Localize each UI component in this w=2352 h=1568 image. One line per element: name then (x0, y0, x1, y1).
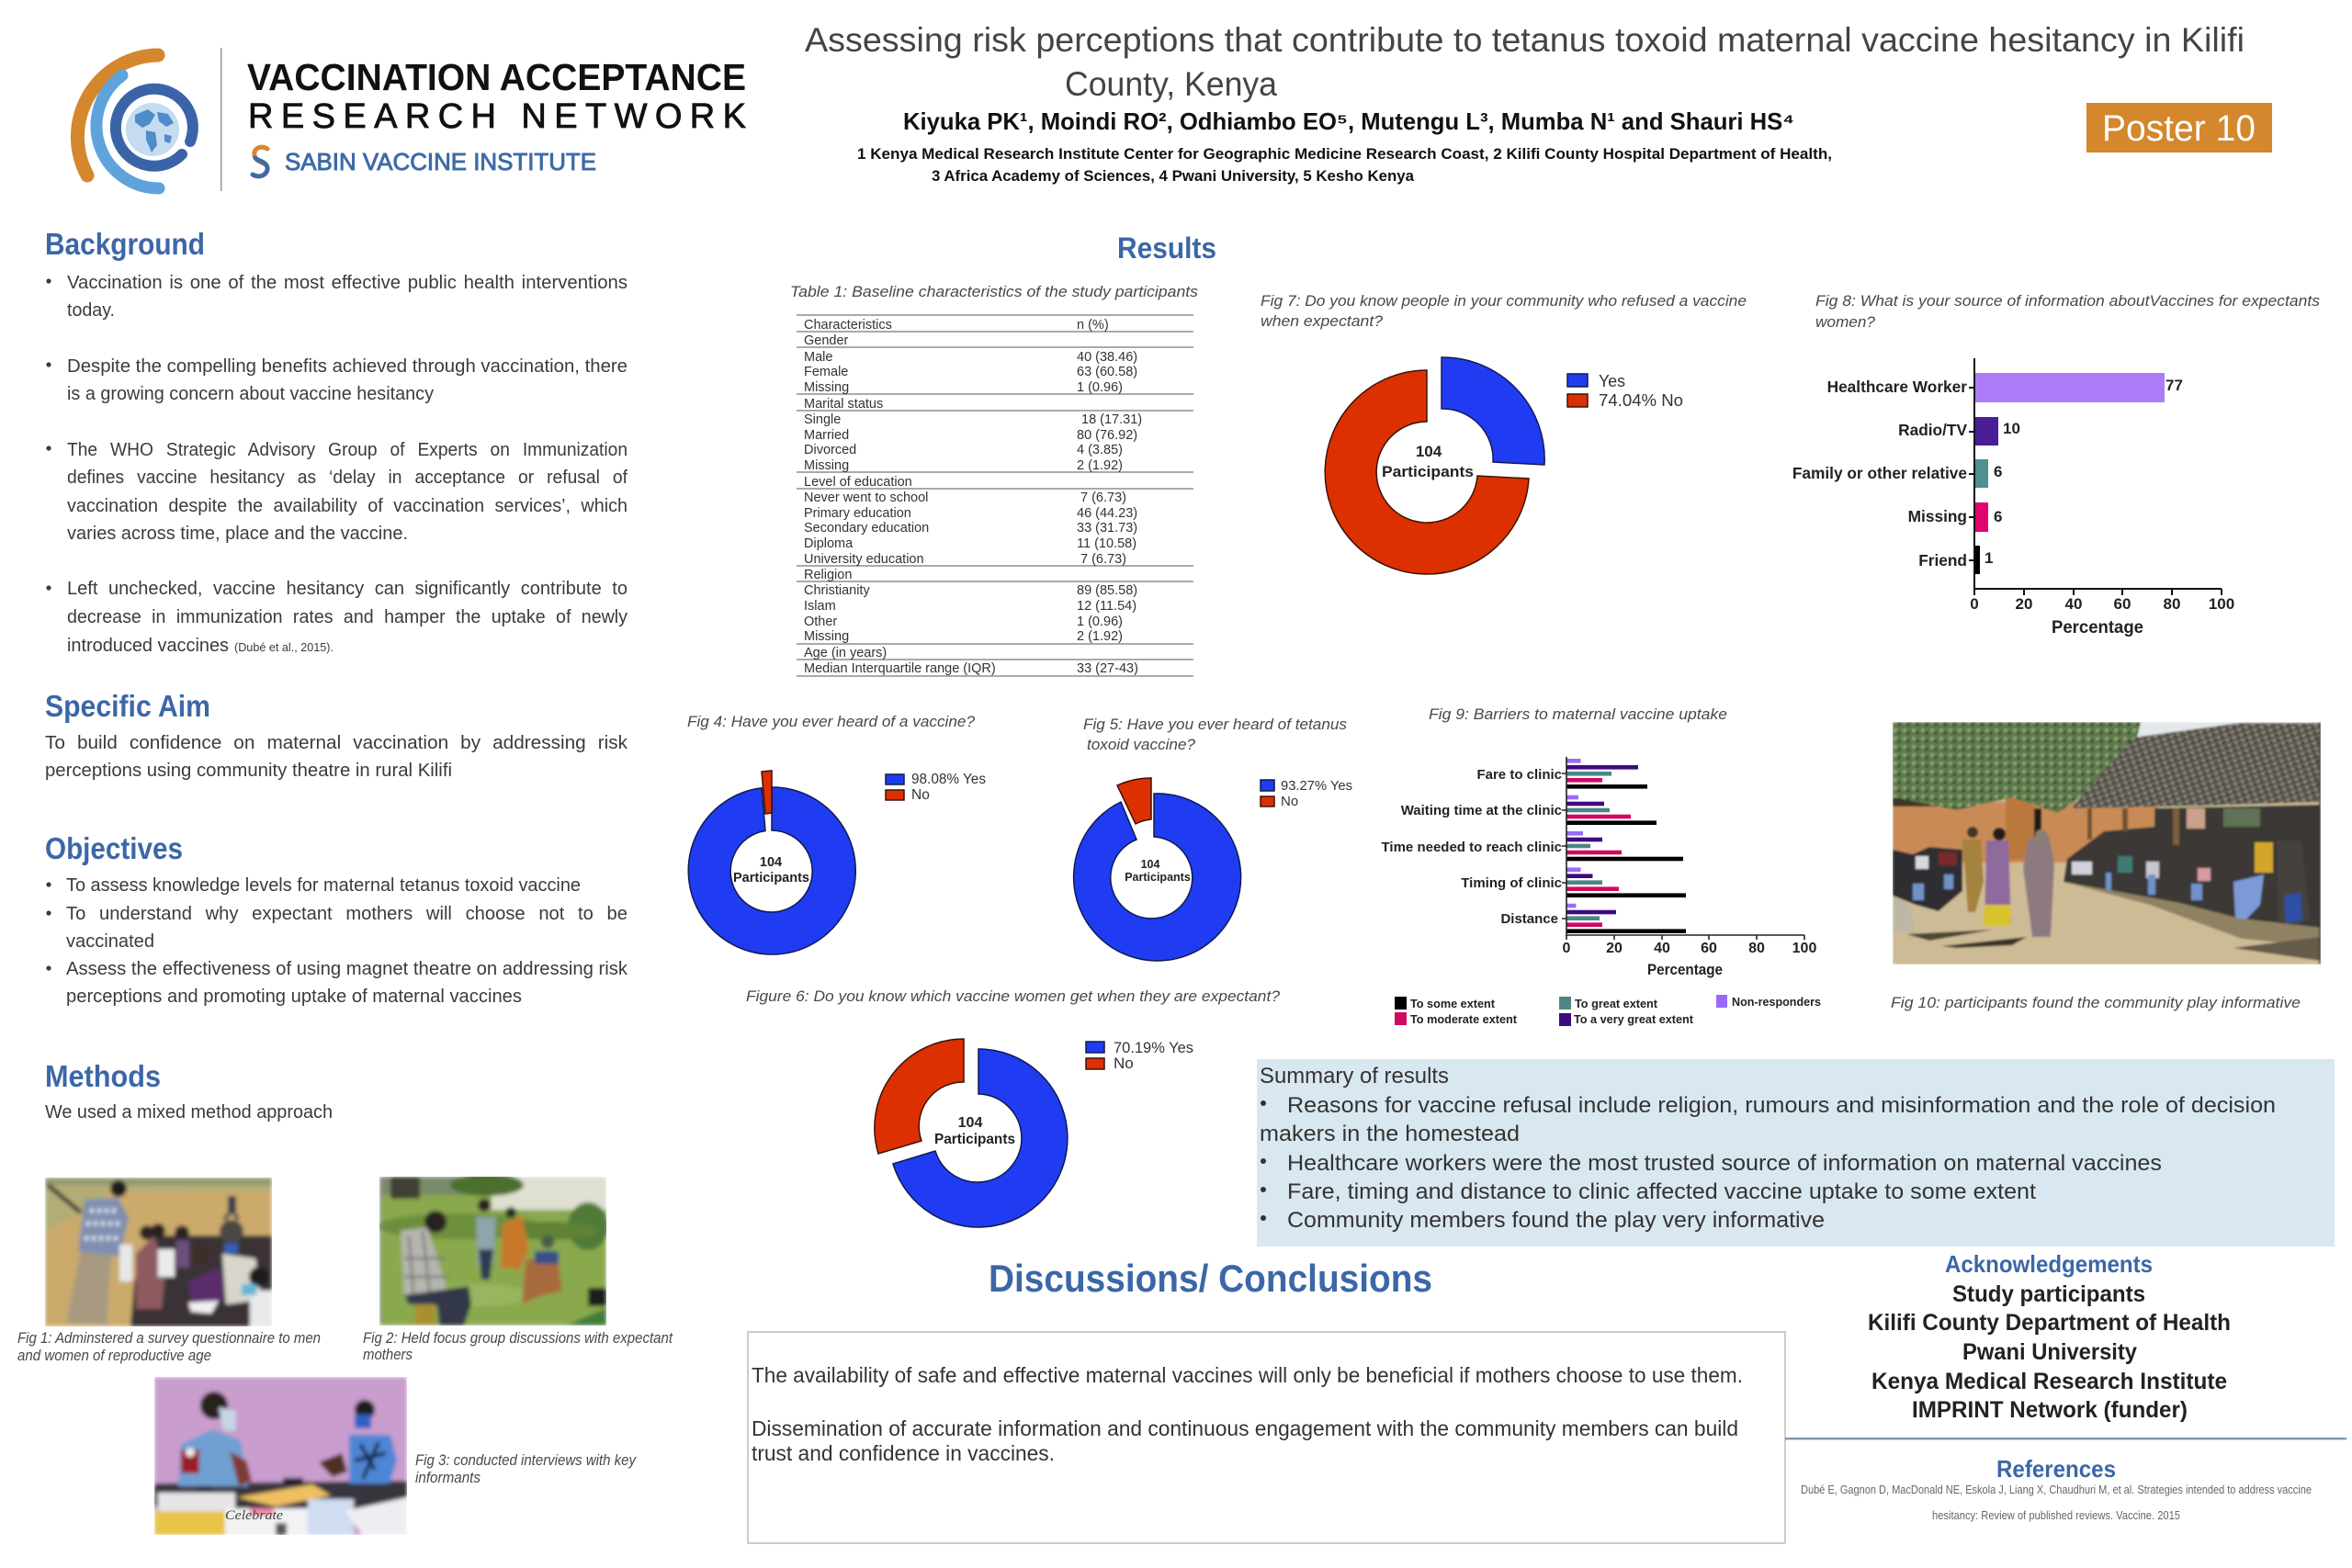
chart: fig 5 donut (1074, 716, 1352, 961)
chart: fig 6 donut (746, 987, 1281, 1227)
background bullets: vaccination despite the availability of vaccination services’, which (67, 496, 628, 516)
panel: conclusions text box: trust and confidence in vaccines. (752, 1441, 1055, 1465)
objectives list: perceptions and promoting uptake of maternal vaccines (66, 987, 522, 1007)
axis tick labels: 20 (2016, 595, 2032, 613)
donut slices (1325, 357, 1544, 574)
axis tick labels: 0 (1970, 595, 1979, 613)
donut centre label: Participants (1382, 463, 1474, 480)
legend (1261, 778, 1352, 809)
table labels column: Single (804, 412, 841, 427)
donut centre label: 104 (1416, 443, 1442, 460)
legend: To a very great extent (1574, 1012, 1694, 1026)
legend (1567, 372, 1683, 410)
table labels column: Religion (804, 568, 852, 582)
centre label: Participants (934, 1132, 1015, 1147)
table labels column: University education (804, 552, 924, 567)
caption: fig 6: Figure 6: Do you know which vaccine women get when they are expectant? (746, 987, 1281, 1005)
table labels column: Missing (804, 380, 849, 395)
table values column: 33 (27-43) (1077, 661, 1138, 676)
non-responder bars (1566, 759, 1583, 908)
table labels column: Gender (804, 333, 849, 348)
table values column: 7 (6.73) (1080, 552, 1126, 567)
value labels: 6 (1994, 463, 2002, 480)
legend: 70.19% Yes (1114, 1039, 1193, 1056)
table labels column: Christianity (804, 583, 870, 598)
table values column: 18 (17.31) (1081, 412, 1142, 427)
title block (805, 21, 2245, 185)
axis tick labels: 20 (1606, 941, 1623, 956)
category labels: Family or other relative (1792, 464, 1967, 482)
caption: fig 1 (17, 1329, 321, 1364)
caption: fig 7 (1261, 292, 1747, 330)
caption: fig 8 (1815, 292, 2321, 331)
table labels column: Divorced (804, 443, 856, 457)
caption: fig 3 (415, 1451, 637, 1486)
caption: fig 4: Fig 4: Have you ever heard of a vaccine? (687, 713, 976, 730)
axis tick labels: 40 (1654, 941, 1670, 956)
value labels (1984, 377, 2183, 567)
value labels: 77 (2165, 377, 2183, 394)
table labels column: Married (804, 428, 849, 443)
table labels column: Median Interquartile range (IQR) (804, 661, 996, 676)
panel: methods (45, 1059, 333, 1122)
acknowledgement names: Pwani University (1962, 1339, 2137, 1365)
very great extent bars (1566, 765, 1638, 914)
table values column: 12 (11.54) (1077, 599, 1136, 614)
caption: fig 5: toxoid vaccine? (1087, 736, 1196, 753)
icon: Sabin S (253, 147, 267, 176)
caption: fig 10: Fig 10: participants found the community play informative (1891, 994, 2301, 1011)
category labels: Missing (1908, 507, 1967, 525)
objectives list: Assess the effectiveness of using magnet theatre on addressing risk (66, 959, 628, 979)
table labels column: Primary education (804, 506, 911, 521)
panel: summary of results: Reasons for vaccine refusal include religion, rumours and misinformation and the role of decision (1287, 1093, 2276, 1118)
axis tick labels: 80 (2164, 595, 2180, 613)
caption: fig 8: women? (1815, 313, 1876, 331)
panel: conclusions text box: Dissemination of accurate information and continuous engagement with the community members can build (752, 1416, 1738, 1440)
caption: fig 1: Fig 1: Adminstered a survey questionnaire to men (17, 1329, 321, 1347)
affiliations line 2: 3 Africa Academy of Sciences, 4 Pwani University, 5 Kesho Kenya (932, 167, 1415, 185)
centre label: Participants (1125, 871, 1191, 884)
table caption: Table 1: Baseline characteristics of the study participants (790, 283, 1199, 300)
photo: focus group discussions (377, 1174, 608, 1325)
logo wordmark line 1: VACCINATION ACCEPTANCE (247, 56, 746, 98)
table labels column: Missing (804, 458, 849, 473)
legend: No (1281, 794, 1298, 809)
background bullets: varies across time, place and the vaccine. (67, 524, 408, 544)
table values column: 33 (31.73) (1077, 521, 1137, 536)
heading: Results: Results (1117, 231, 1216, 265)
photo: community play (1893, 722, 2321, 964)
table labels column: Age (in years) (804, 646, 887, 660)
axis tick labels: 80 (1748, 941, 1765, 956)
heading: Objectives: Objectives (45, 831, 183, 865)
caption: fig 1: and women of reproductive age (17, 1347, 211, 1364)
heading: Acknowledgements: Acknowledgements (1945, 1250, 2153, 1278)
table values column: 46 (44.23) (1077, 506, 1137, 521)
table values column: 80 (76.92) (1077, 428, 1137, 443)
background bullets: introduced vaccines (67, 636, 229, 656)
title line 2: County, Kenya (1065, 65, 1277, 103)
acknowledgement names (1868, 1281, 2231, 1423)
table labels column: Female (804, 365, 848, 379)
chart: fig 8 source of information (1792, 292, 2321, 637)
logo: Vaccination Acceptance Research Network (77, 48, 746, 191)
background bullets: decrease in immunization rates and hamper the uptake of newly (67, 607, 628, 627)
panel: conclusions text box: The availability of safe and effective maternal vaccines will only be beneficial if mothers choose to use them. (752, 1363, 1743, 1387)
centre label: 104 (958, 1115, 982, 1131)
donut slices (1074, 778, 1241, 961)
axis tick labels (1563, 941, 1816, 956)
panel: summary of results: Summary of results (1260, 1064, 1449, 1089)
table values column: 11 (10.58) (1077, 536, 1136, 551)
caption: fig 2: Fig 2: Held focus group discussions with expectant (363, 1329, 673, 1347)
caption: fig 5 (1083, 716, 1347, 753)
heading: Methods: Methods (45, 1059, 161, 1093)
category labels: Fare to clinic (1476, 767, 1562, 783)
photo: key informant interview (154, 1377, 407, 1535)
table labels column: Never went to school (804, 491, 928, 505)
axis title: Percentage (1647, 962, 1723, 978)
value labels: 1 (1984, 549, 1993, 567)
acknowledgement names: Kenya Medical Research Institute (1871, 1369, 2227, 1394)
reference text (1801, 1483, 2312, 1522)
centre label: 104 (760, 855, 782, 870)
chart: fig 4 donut (687, 713, 986, 954)
axis title: Percentage (2052, 618, 2143, 637)
centre label (1125, 858, 1191, 884)
value labels: 10 (2003, 420, 2020, 437)
great extent bars (1566, 772, 1611, 920)
caption: fig 2: mothers (363, 1346, 413, 1363)
category labels (1382, 767, 1562, 927)
panel: specific aim (45, 689, 628, 781)
caption: fig 3: informants (415, 1469, 481, 1486)
Sabin Vaccine Institute wordmark: SABIN VACCINE INSTITUTE (285, 148, 596, 175)
centre label: Participants (733, 871, 809, 886)
background bullets: defines vaccine hesitancy as ‘delay in acceptance or refusal of (67, 468, 628, 488)
caption: fig 2 (363, 1329, 673, 1363)
table rules (797, 315, 1193, 676)
axis tick labels: 40 (2065, 595, 2082, 613)
panel: summary of results: Fare, timing and distance to clinic affected vaccine uptake to some extent (1287, 1179, 2036, 1204)
objectives list (46, 875, 628, 1007)
caption: fig 9: Fig 9: Barriers to maternal vaccine uptake (1429, 705, 1727, 723)
background bullets: is a growing concern about vaccine hesitancy (67, 384, 434, 404)
caption: fig 7: when expectant? (1261, 312, 1384, 330)
donut slices (688, 771, 855, 954)
panel: summary of results: makers in the homestead (1260, 1122, 1520, 1146)
aim text: perceptions using community theatre in rural Kilifi (45, 761, 452, 781)
aim text: To build confidence on maternal vaccination by addressing risk (45, 733, 628, 753)
table labels column: Islam (804, 599, 836, 614)
background bullets: (Dubé et al., 2015). (234, 641, 334, 654)
objectives list: vaccinated (66, 931, 154, 952)
panel: references (1801, 1455, 2312, 1522)
panel: acknowledgements (1868, 1250, 2231, 1423)
icon: concentric arcs and globe (77, 55, 193, 188)
caption: fig 8: Fig 8: What is your source of information aboutVaccines for expectants (1815, 292, 2321, 310)
table values column: 7 (6.73) (1080, 491, 1126, 505)
axes (1562, 757, 1804, 940)
affiliations line 1: 1 Kenya Medical Research Institute Center for Geographic Medicine Research Coast, 2 Kilifi County Hospital Department of Health, (857, 145, 1832, 163)
category labels: Healthcare Worker (1827, 378, 1967, 396)
table labels column: Diploma (804, 536, 854, 551)
heading: Background: Background (45, 227, 205, 261)
table values column (1077, 318, 1142, 676)
legend: Yes (1599, 372, 1625, 390)
donut slices (875, 1039, 1068, 1227)
axis tick labels: 60 (2114, 595, 2131, 613)
category labels: Waiting time at the clinic (1401, 803, 1562, 818)
table labels column: Characteristics (804, 318, 892, 333)
legend: 74.04% No (1599, 391, 1683, 410)
heading: References: References (1996, 1455, 2116, 1483)
table values column: 2 (1.92) (1077, 458, 1123, 473)
background bullets: today. (67, 300, 115, 321)
table labels column: Missing (804, 629, 849, 644)
table labels column: Secondary education (804, 521, 929, 536)
table values column: 1 (0.96) (1077, 615, 1123, 629)
poster badge: Poster 10 (2102, 108, 2256, 149)
panel: objectives (45, 831, 628, 1007)
caption: fig 7: Fig 7: Do you know people in your community who refused a vaccine (1261, 292, 1747, 310)
objectives list: To understand why expectant mothers will choose not to be (66, 904, 628, 924)
axis tick labels (1970, 595, 2234, 613)
table values column: 1 (0.96) (1077, 380, 1123, 395)
table values column: 63 (60.58) (1077, 365, 1137, 379)
value labels: 6 (1994, 508, 2002, 525)
legend (886, 772, 986, 803)
table labels column (804, 318, 996, 676)
axis tick labels: 60 (1701, 941, 1717, 956)
some extent bars (1566, 784, 1686, 933)
axes (1969, 358, 2222, 595)
legend: No (911, 787, 930, 803)
acknowledgement names: Study participants (1952, 1281, 2145, 1307)
background bullets: Left unchecked, vaccine hesitancy can significantly contribute to (67, 579, 628, 599)
legend: Non-responders (1732, 995, 1821, 1009)
axis tick labels: 0 (1563, 941, 1571, 956)
legend: To moderate extent (1410, 1012, 1518, 1026)
centre label: 104 (1141, 858, 1159, 871)
legend: No (1114, 1055, 1134, 1072)
table values column: 2 (1.92) (1077, 629, 1123, 644)
photo: survey questionnaire (45, 1178, 272, 1326)
reference text: hesitancy: Review of published reviews. Vaccine. 2015 (1932, 1508, 2180, 1522)
table values column: 40 (38.46) (1077, 350, 1137, 365)
table labels column: Level of education (804, 475, 912, 490)
table labels column: Male (804, 350, 832, 365)
background bullets: The WHO Strategic Advisory Group of Experts on Immunization (67, 440, 628, 460)
background bullets: Despite the compelling benefits achieved through vaccination, there (67, 356, 628, 377)
chart: fig 9 barriers (1382, 705, 1821, 1026)
caption: fig 5: Fig 5: Have you ever heard of tetanus (1083, 716, 1347, 733)
category labels (1792, 378, 1967, 570)
chart: fig 7 donut (1261, 292, 1747, 574)
authors: Kiyuka PK¹, Moindi RO², Odhiambo EO⁵, Mutengu L³, Mumba N¹ and Shauri HS⁴ (903, 107, 1794, 135)
table values column: 89 (85.58) (1077, 583, 1137, 598)
methods intro: We used a mixed method approach (45, 1102, 333, 1122)
panel: summary of results: Community members found the play very informative (1287, 1208, 1825, 1233)
centre label (934, 1115, 1015, 1147)
category labels: Friend (1918, 551, 1967, 570)
table 1: baseline characteristics (790, 283, 1199, 676)
panel: summary of results: Healthcare workers were the most trusted source of information on maternal vaccines (1287, 1151, 2162, 1176)
acknowledgement names: Kilifi County Department of Health (1868, 1310, 2231, 1336)
aim text (45, 733, 628, 781)
table labels column: Marital status (804, 397, 883, 412)
objectives list: To assess knowledge levels for maternal tetanus toxoid vaccine (66, 875, 581, 896)
logo wordmark line 2: RESEARCH NETWORK (248, 97, 746, 136)
legend: 93.27% Yes (1281, 778, 1352, 794)
table values column: 4 (3.85) (1077, 443, 1123, 457)
centre label (733, 855, 809, 886)
panel: summary of results (1257, 1059, 2335, 1247)
axis tick labels: 100 (1792, 941, 1816, 956)
background bullets (46, 273, 628, 656)
caption: fig 3: Fig 3: conducted interviews with key (415, 1451, 637, 1469)
photo signage text: Celebrate (225, 1508, 283, 1523)
bars (1974, 373, 2165, 574)
legend: 98.08% Yes (911, 772, 986, 787)
panel: background (45, 227, 628, 656)
table labels column: Other (804, 615, 837, 629)
legend: To great extent (1575, 997, 1658, 1010)
heading: Discussions / Conclusions: Discussions/ Conclusions (989, 1257, 1432, 1300)
moderate extent bars (1566, 778, 1631, 927)
table values column: n (%) (1077, 318, 1109, 333)
legend: To some extent (1410, 997, 1496, 1010)
category labels: Distance (1500, 911, 1558, 927)
title line 1: Assessing risk perceptions that contribute to tetanus toxoid maternal vaccine hesitancy in Kilifi (805, 21, 2245, 59)
panel: conclusions text box (748, 1332, 1785, 1543)
category labels: Time needed to reach clinic (1382, 840, 1562, 855)
poster badge (2086, 103, 2272, 152)
category labels: Radio/TV (1898, 421, 1967, 439)
heading: Specific Aim: Specific Aim (45, 689, 210, 723)
donut centre label (1382, 443, 1474, 480)
background bullets: Vaccination is one of the most effective public health interventions (67, 273, 628, 293)
legend (1395, 995, 1821, 1026)
acknowledgement names: IMPRINT Network (funder) (1912, 1397, 2188, 1423)
category labels: Timing of clinic (1461, 875, 1562, 891)
legend (1086, 1039, 1193, 1072)
axis tick labels: 100 (2209, 595, 2234, 613)
